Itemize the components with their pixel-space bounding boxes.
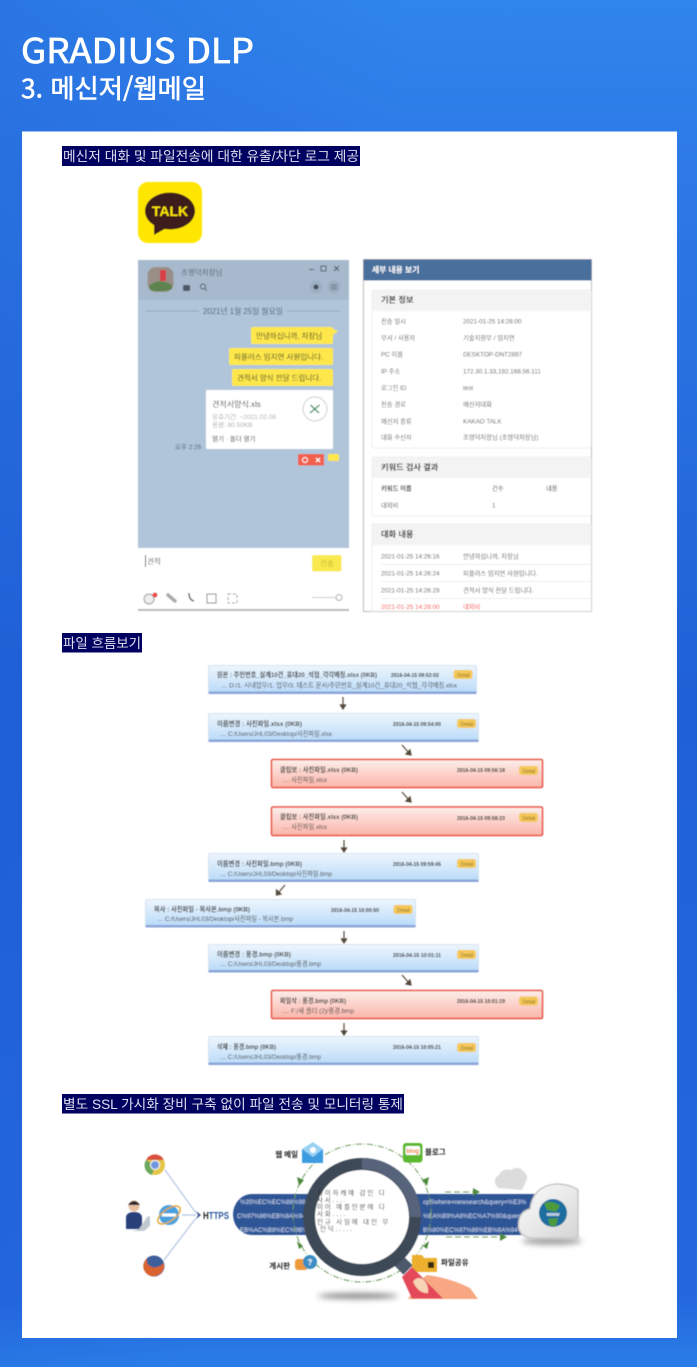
section: basic info: 부서 / 사용자 (381, 333, 415, 342)
arrow (340, 697, 346, 709)
section label: SSL: 별도 SSL 가시화 장비 구축 없이 파일 전송 및 모니터링 통제 (63, 1097, 403, 1112)
arrow (402, 975, 411, 985)
subheading: messenger and webmail: 3. 메신저/웹메일 (21, 69, 206, 106)
hand holding magnifier (402, 1267, 478, 1299)
flow box 8: 파일삭 : 풍경.bmp (0KB) (280, 996, 346, 1005)
diagram: HTTPS inspection (126, 1142, 582, 1299)
icon: globe: www (546, 1212, 560, 1218)
flow chart (146, 666, 542, 1065)
section: basic info: PC 이름 (381, 350, 403, 358)
title (21, 24, 254, 106)
flow box 9: 2016-04-15 10:05:21 (393, 1045, 441, 1051)
file card: 열기 · 폴더 열기 (212, 434, 255, 443)
section: conversation: 2021-01-25 14:26:24 (381, 570, 440, 578)
magnifier: 미 어 에 를 인 받 에 다 (317, 1202, 385, 1211)
icon: blog: 블로그 (425, 1146, 446, 1156)
section: basic info: 전송 경로 (381, 400, 406, 408)
section: keyword results: 1 (492, 502, 496, 510)
flow box 6: 2016-04-15 10:00:50 (331, 908, 379, 914)
shadow under magnifier (318, 1293, 398, 1299)
icon: webmail (275, 1142, 323, 1163)
flow box 5: 2016-04-15 09:59:45 (393, 862, 441, 868)
encrypted data band: B%80%EC%97%86%EB%8A%94+%E3% (423, 1227, 540, 1234)
small arrows (473, 1188, 507, 1241)
message input (138, 548, 349, 612)
flow box 1: 2016-04-15 09:52:02 (391, 673, 439, 679)
cloud icons (495, 1168, 582, 1245)
icon: user at laptop (126, 1200, 150, 1231)
flow box 7: 이름변경 : 풍경.bmp (0KB) (217, 950, 291, 958)
magnifier: 인 규 사 일 에 대 인 무 (317, 1217, 388, 1226)
section: conversation: 피플러스 임지연 사원입니다. (463, 568, 538, 578)
section label: file flow: 파일 흐름보기 (63, 636, 141, 651)
flow box 9: … C:/Users/JHL03/Desktop/풍경.bmp (220, 1052, 321, 1061)
flow box 2: … C:/Users/JHL03/Desktop/사진파일.xlsx (220, 729, 333, 738)
section: keyword results: 키워드 이름 (381, 484, 412, 492)
flow box 7: 2016-04-15 10:01:11 (393, 953, 441, 959)
section: basic info: 조영덕차장님 (조영덕차장님) (463, 432, 538, 442)
flow box 2: 2016-04-15 09:54:00 (393, 722, 441, 728)
flow box 3 (272, 760, 542, 788)
arrow (402, 792, 411, 802)
magnifier: 사 서 . . . . (317, 1195, 345, 1204)
flow box 1: Detail (457, 673, 470, 679)
flow box 6: … C:/Users/JHL03/Desktop/사진파일 - 복사본.bmp (157, 914, 293, 923)
flow box 2: 이름변경 : 사진파일.xlsx (0KB) (217, 719, 302, 728)
flow box 2: Detail (460, 722, 473, 728)
chat header: 조영덕차장님 (181, 267, 222, 277)
section: basic info: 로그인 ID (381, 383, 407, 392)
flow box 5: 이름변경 : 사진파일.bmp (0KB) (217, 859, 302, 868)
encrypted data band: C%97%86%EB%8A%94+%EC%EC (237, 1213, 338, 1220)
section: conversation: 안녕하십니까, 차장님 (463, 552, 519, 560)
file card (175, 390, 333, 451)
section: conversation: 대화 내용 (381, 529, 414, 539)
flow box 4: 2016-04-15 09:58:23 (457, 816, 505, 822)
flow box 8 (272, 990, 542, 1018)
flow box 8: Detail (522, 1000, 535, 1006)
HTTPS label: HTTPS (203, 1211, 229, 1222)
message input: 전송 (320, 558, 334, 568)
icon: file sharing folder (412, 1255, 469, 1272)
flow box 8: … F:/새 폴더 (2)/풍경.bmp (283, 1006, 354, 1015)
section: basic info: KAKAO TALK (463, 418, 502, 426)
icon: file sharing folder: 파일공유 (441, 1257, 469, 1267)
flow box 6: 복사 : 사진파일 - 복사본.bmp (0KB) (154, 904, 250, 914)
message bubbles: 안녕하십니까, 차장님 (256, 330, 322, 340)
dashed inspection ring (293, 1144, 431, 1282)
magnifier (309, 1158, 421, 1270)
detail header (364, 260, 592, 280)
arrow (342, 1023, 346, 1035)
icon: globe (539, 1199, 567, 1227)
flow box 4 (272, 807, 542, 836)
section: basic info: 대화 수신자 (381, 432, 412, 442)
icon: Firefox (143, 1256, 164, 1276)
section: basic info: IP 주소 (381, 368, 400, 376)
flow box 3: … 사진파일.xlsx (283, 775, 328, 784)
section: keyword results (372, 457, 591, 516)
section: basic info (372, 290, 591, 448)
flow box 4: Detail (522, 816, 535, 822)
flow box 5: … C:/Users/JHL03/Desktop/사진파일.bmp (220, 869, 332, 878)
encrypted data band: opSwhere=newsearch&query=%E3%AC% (423, 1199, 541, 1206)
blocked buttons (298, 454, 339, 466)
flow box 9: 삭제 : 풍경.bmp (0KB) (217, 1042, 276, 1051)
file card: 견적서양식.xls (212, 399, 261, 409)
flow box 3: 2016-04-15 09:56:18 (457, 768, 505, 774)
flow box 3: 클립보 : 사진파일.xlsx (0KB) (280, 765, 358, 774)
section: basic info: 기본 정보 (381, 294, 414, 304)
detail header: 세부 내용 보기 (372, 264, 419, 274)
date divider: 2021년 1월 25일 월요일 (203, 306, 283, 316)
arrow (342, 840, 346, 852)
section: basic info: 메신저대화 (463, 400, 492, 408)
icon: Chrome (144, 1154, 165, 1175)
encrypted data band: %EA%B9%A8%EC%A7%90&query=%E (423, 1213, 535, 1220)
flow box 6: Detail (397, 908, 410, 914)
section: conversation: 대외비 (463, 602, 480, 611)
section: basic info: 172.30.1.33,192.168.56.111 (463, 368, 541, 376)
encrypted data band: EB%AC%B8%EC%9B%EC (240, 1227, 317, 1234)
panel: detail view screenshot (364, 260, 592, 612)
section: conversation: 2021-01-25 14:26:16 (381, 554, 440, 560)
section: basic info: test (463, 385, 473, 392)
section: basic info: 기술지원부 / 임지연 (463, 333, 515, 342)
icon: KakaoTalk (138, 182, 202, 243)
connection lines (164, 1170, 196, 1260)
message bubbles: 견적서 양식 전달 드립니다. (237, 372, 321, 382)
flow box 4: 클립보 : 사진파일.xlsx (0KB) (280, 812, 358, 821)
flow box 7: Detail (460, 953, 473, 959)
heading: GRADIUS DLP: GRADIUS DLP (21, 24, 254, 73)
flow box 9 (208, 1036, 478, 1065)
message bubbles: 피플러스 임지연 사원입니다. (234, 352, 323, 362)
section label: log: 메신저 대화 및 파일전송에 대한 유출/차단 로그 제공 (63, 149, 359, 164)
flow box 4: … 사진파일.xlsx (283, 822, 328, 831)
magnifier: 차 이 하 캐 에 감 인 다 (317, 1188, 385, 1197)
section: keyword results: 건수 (492, 484, 504, 492)
arrow (342, 931, 346, 943)
section: keyword results: 대외비 (381, 500, 398, 510)
magnifier: 인 덕 . . . . . (320, 1224, 352, 1233)
file card: 용량: 60.50KB (212, 421, 253, 429)
section: conversation: 2021-01-25 14:26:29 (381, 588, 440, 594)
flow box 5 (208, 854, 478, 882)
flow box 8: 2016-04-15 10:01:19 (457, 999, 505, 1005)
flow box 6 (146, 900, 416, 928)
section: basic info: DESKTOP-DNT2897 (463, 352, 523, 358)
flow box 1: … D:/1. 시내업무/1. 업무/3. 테스트 문서/주민번호_실계10건_휴대20_석협_각각메칭.xlsx (221, 680, 458, 690)
section: keyword results: 키워드 검사 결과 (381, 462, 439, 472)
section: basic info: 메신저 종류 (381, 416, 412, 426)
ring arrowheads (297, 1177, 429, 1249)
flow box 1 (208, 666, 476, 694)
icon: Internet Explorer (155, 1203, 183, 1227)
icon: KakaoTalk: TALK (152, 203, 188, 219)
message bubbles (229, 327, 338, 386)
section: conversation: 견적서 양식 전달 드립니다. (463, 586, 534, 594)
icon: webmail: 웹 메일 (275, 1149, 298, 1159)
section: basic info: 전송 일시 (381, 316, 406, 326)
file card: 유효기간: ~2021.02.08 (212, 412, 276, 421)
section: conversation (372, 524, 591, 611)
HTTPS label (196, 1211, 229, 1222)
flow box 5: Detail (460, 862, 473, 868)
message input: 견적 (147, 556, 161, 566)
encrypted data band: %35%EC%EC%88%98%EC%EC (240, 1199, 334, 1206)
chat header (138, 260, 349, 300)
flow box 2 (208, 714, 478, 742)
magnifier: 사 화 . . . . (317, 1209, 345, 1218)
section: keyword results: 내용 (546, 484, 558, 492)
encrypted data band (233, 1194, 541, 1235)
flow box 9: Detail (460, 1046, 473, 1052)
panel: chat window screenshot (138, 260, 349, 612)
flow box 7 (208, 944, 478, 972)
icon: forum: ? (308, 1258, 313, 1267)
flow box 3: Detail (522, 769, 535, 775)
icon: forum: 게시판 (269, 1260, 290, 1270)
icon: forum (269, 1255, 317, 1270)
green flow arrows (445, 1192, 500, 1237)
arrow (276, 885, 285, 895)
icon: blog (403, 1143, 446, 1162)
arrow (402, 745, 411, 755)
icon: blog: blog (406, 1149, 419, 1155)
flow box 1: 원본 : 주민번호_실계10건_휴대20_석협_각각메칭.xlsx (0KB) (217, 670, 377, 679)
file card: 오후 2:26 (175, 443, 202, 451)
section: conversation: 2021-01-25 14:28:00 (381, 604, 440, 611)
flow box 7: … C:/Users/JHL03/Desktop/풍경.bmp (220, 959, 321, 968)
section: basic info: 2021-01-25 14:28:00 (463, 318, 522, 326)
